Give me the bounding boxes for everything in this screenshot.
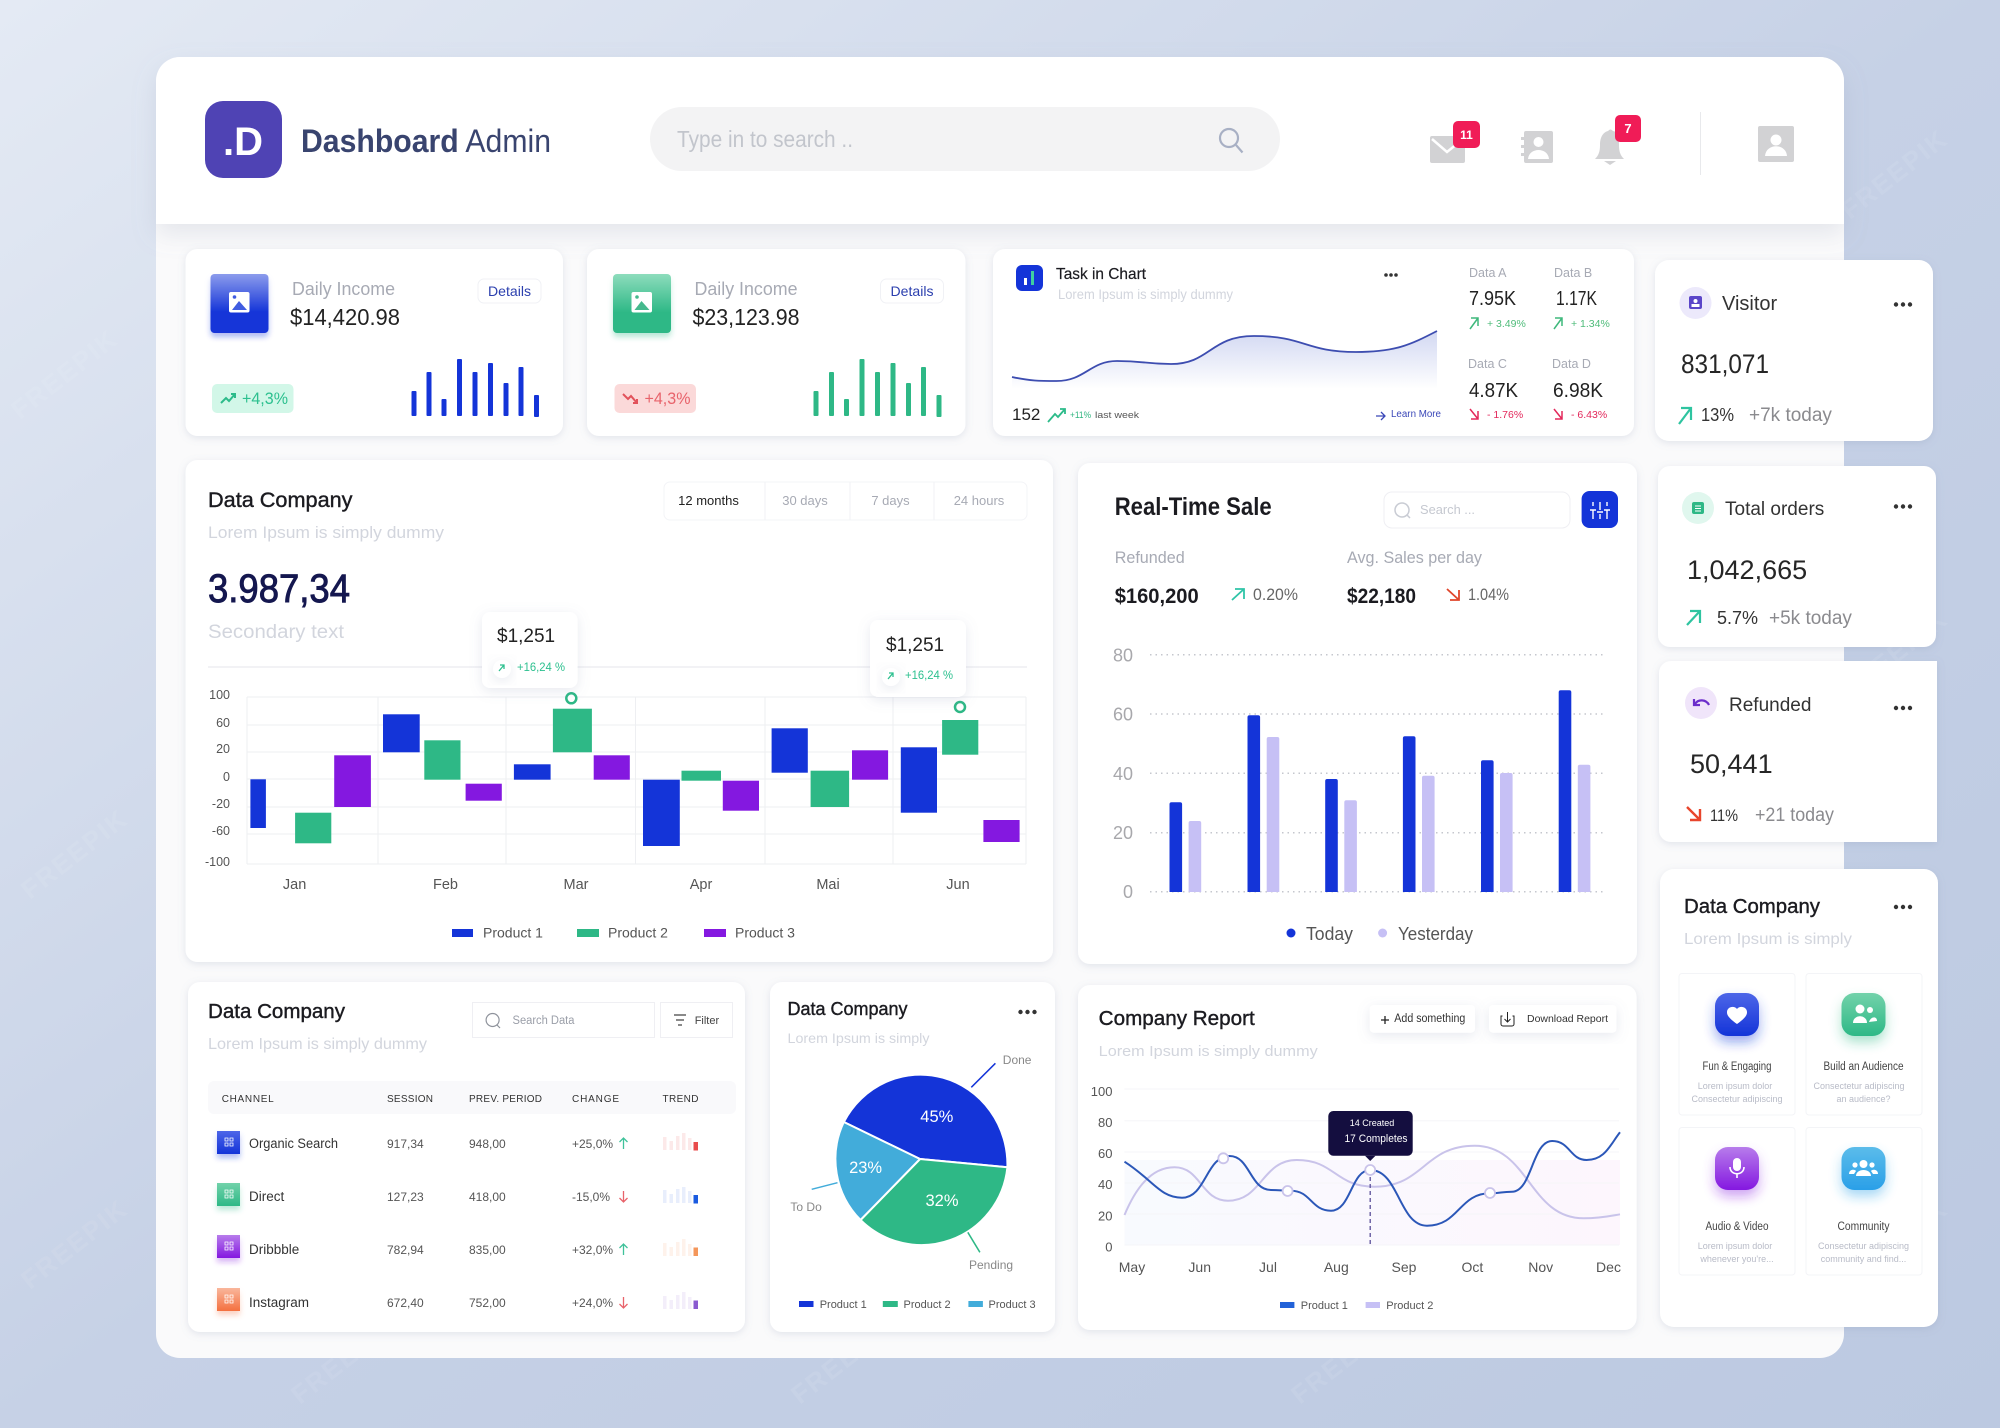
stat: refunded [1115,548,1298,608]
icon: filter button [1582,491,1618,528]
row: organic search: Organic Search [249,1136,338,1151]
trend stat [1687,608,1852,629]
legend [452,924,795,940]
tile: fun and engaging: Lorem ipsum dolor [1698,1081,1772,1091]
tile: audio and video [1679,1128,1795,1275]
grouped bar chart [1113,646,1605,902]
tile: fun and engaging: Consectetur adipiscing [1691,1094,1783,1104]
stat: data d: - 6.43% [1571,409,1607,421]
line chart: 60 [1098,1146,1112,1161]
row: direct: -15,0% [572,1190,610,1204]
table header [208,1081,736,1114]
tile: audio and video: whenever you're... [1699,1254,1774,1264]
heading: Company Report [1099,1008,1255,1030]
search field [472,1002,654,1038]
callout: done [971,1053,1032,1087]
search bar: Type in to search .. [677,126,853,152]
filter button [660,1002,732,1038]
search field [1384,492,1570,528]
stat: data a [1469,266,1526,330]
tile: fun and engaging [1679,974,1795,1115]
waterfall bar chart: Mai [816,877,840,893]
tile: community: Community [1838,1221,1890,1233]
trend stat: +5k today [1769,608,1852,629]
heading: Data Company [208,1001,345,1023]
row: dribbble: 782,94 [387,1243,424,1257]
line chart: Jul [1259,1259,1277,1275]
waterfall bar chart: -60 [212,824,230,838]
tooltip: march: $1,251 [497,626,555,647]
trend stat [1687,805,1834,826]
text: FREEPIK [1285,1308,1404,1410]
stat: data d [1552,357,1607,421]
line chart: Dec [1596,1259,1621,1275]
row: instagram: +24,0% [572,1296,613,1310]
stat: avg sales: 1.04% [1468,586,1509,604]
waterfall bar chart: 100 [209,688,230,702]
stat: data c: 4.87K [1469,380,1519,402]
line chart: Oct [1462,1259,1483,1275]
label: Daily Income [694,279,798,299]
button: download report: Download Report [1527,1013,1608,1025]
stat: avg sales: Avg. Sales per day [1347,548,1482,567]
trend stat: 5.7% [1717,608,1758,628]
row: direct: Direct [249,1189,285,1204]
text: FREEPIK [1835,123,1954,225]
mini bar chart [412,359,539,417]
legend: Product 1 [483,924,543,940]
line chart: 20 [1098,1208,1112,1224]
panel: pie chart [770,982,1055,1332]
tile: build an audience: Build an Audience [1824,1061,1904,1073]
panel: channel table: Lorem Ipsum is simply dummy [208,1036,427,1053]
stat: refunded: $160,200 [1115,585,1199,608]
period selector: 7 days [871,493,910,508]
stat: data b: 1.17K [1556,288,1598,310]
stat: data c: Data C [1468,357,1507,371]
icon: bell with badge: 7 [1624,121,1632,136]
text: FREEPIK [785,1308,904,1410]
waterfall bar chart: -100 [205,855,230,869]
stat: refunded: Refunded [1115,548,1185,567]
icon: refund [1685,687,1717,719]
panel: visitor: Visitor [1722,293,1778,315]
row: dribbble: Dribbble [249,1242,299,1257]
panel: refunded [1659,661,1937,842]
trend stat: 11% [1710,806,1738,825]
title: Dashboard Admin [301,123,551,159]
stat: data b: Data B [1554,266,1592,280]
legend [799,1299,1036,1311]
tooltip: created and completes: 17 Completes [1344,1133,1408,1145]
waterfall bar chart: 20 [216,742,230,756]
icon: image tile green [613,274,671,333]
waterfall bar chart: Mar [564,877,589,893]
tooltip: june [870,620,966,697]
line chart: Jun [1188,1259,1211,1275]
stat: data d: 6.98K [1553,380,1604,402]
table header: CHANNEL [222,1094,274,1105]
panel: data company chart [186,460,1053,962]
callout: to do: To Do [790,1200,822,1214]
search bar [650,107,1280,171]
row: organic search: 917,34 [387,1137,424,1151]
button: add something: Add something [1394,1013,1465,1025]
legend [1286,924,1473,944]
heading: Data Company [208,489,353,512]
tooltip: march [482,612,578,688]
tooltip: june: +16,24 % [905,670,953,682]
pie [835,1075,1007,1245]
period selector: 24 hours [954,493,1005,508]
text: FREEPIK [285,1308,404,1410]
row: organic search [217,1131,698,1154]
waterfall bar chart: 60 [216,716,230,730]
stat: data a: 7.95K [1469,288,1517,310]
period selector [664,482,1027,520]
legend: Product 1 [820,1299,867,1311]
stat: data b [1554,266,1610,330]
tile: audio and video: Lorem ipsum dolor [1698,1241,1772,1251]
button: add something [1370,1005,1475,1033]
panel: total orders [1658,466,1936,647]
value: $14,420.98 [290,304,400,330]
tile: community: Consectetur adipiscing [1818,1241,1909,1251]
value: $23,123.98 [692,304,800,330]
waterfall bar chart: -20 [212,797,230,811]
line chart: 0 [1105,1240,1112,1254]
tile: build an audience [1806,974,1922,1115]
panel: daily income green [587,249,966,436]
button: download report [1489,1005,1616,1033]
legend: Product 3 [735,924,795,940]
logo: .D [223,120,263,164]
panel: task in chart: Lorem Ipsum is simply dummy [1058,287,1233,302]
line chart: Nov [1528,1259,1553,1275]
stat: data a: Data A [1469,266,1507,280]
icon: visitor [1680,287,1712,319]
stat: avg sales: $22,180 [1347,585,1416,608]
footer stats: +11% [1070,410,1091,421]
panel: data company features: Lorem Ipsum is simply [1684,931,1852,948]
grouped bar chart: 80 [1113,646,1133,666]
trend stat: 13% [1701,405,1734,425]
icon: mail with badge [1430,121,1480,163]
row: direct: 418,00 [469,1190,506,1204]
icon: user profile [1758,126,1794,162]
row: instagram: Instagram [249,1295,309,1310]
tile: community [1806,1128,1922,1275]
heading: Real-Time Sale [1115,493,1272,521]
menu dots [1894,302,1912,307]
waterfall bar chart: Feb [433,877,458,893]
waterfall bar chart: Jan [283,877,306,893]
row: direct [217,1183,698,1206]
table header: PREV. PERIOD [469,1094,542,1105]
tile: build an audience: Consectetur adipiscing [1813,1081,1905,1091]
menu dots [1384,273,1398,277]
search field: Search ... [1420,502,1475,517]
legend: Product 2 [904,1299,951,1311]
menu dots [1894,905,1912,909]
stat: avg sales [1347,548,1509,608]
stat: data c: - 1.76% [1487,409,1523,421]
pie labels [849,1108,959,1210]
panel: task in chart [993,249,1634,436]
legend: Product 3 [988,1299,1036,1311]
line chart: May [1119,1259,1145,1275]
menu dots [1018,1010,1037,1014]
heading: Data Company [788,999,908,1019]
grouped bar chart: 20 [1113,823,1133,843]
stat: data d: Data D [1552,357,1591,371]
text: FREEPIK [1835,603,1954,705]
icon: orders [1682,492,1714,524]
line chart: Sep [1392,1259,1417,1275]
footer stats [1012,405,1441,424]
tile: audio and video: Audio & Video [1706,1221,1768,1233]
label: Daily Income [292,279,395,299]
panel: total orders: 1,042,665 [1687,555,1807,585]
grouped bar chart: 40 [1113,764,1133,784]
waterfall bar chart: Jun [946,877,970,893]
panel: data company chart: Secondary text [208,622,345,643]
table header: SESSION [387,1094,433,1105]
row: organic search: +25,0% [572,1137,613,1151]
change pill: +4,3% [644,389,690,408]
details button [880,279,944,303]
pie labels: 45% [920,1108,954,1126]
icon: image tile blue [210,274,268,333]
panel: data company features [1660,869,1938,1327]
callout: to do [790,1183,838,1214]
footer stats: Learn More [1391,409,1441,420]
table header: CHANGE [572,1094,619,1105]
logo [205,101,282,178]
tooltip: march: +16,24 % [517,662,565,674]
line chart: 80 [1098,1115,1112,1130]
line chart: Aug [1324,1259,1349,1275]
trend stat: +21 today [1755,805,1834,826]
stat: data b: + 1.34% [1571,318,1610,330]
icon: chart tile [1016,265,1043,291]
row: dribbble: 835,00 [469,1243,506,1257]
panel: total orders: Total orders [1725,499,1824,520]
icon: mail with badge: 11 [1460,128,1473,142]
panel: company report [1078,985,1637,1330]
menu dots [1894,504,1912,509]
tile: fun and engaging: Fun & Engaging [1702,1061,1772,1073]
pie labels: 23% [849,1159,882,1177]
grouped bar chart: 0 [1123,882,1133,902]
search field: Search Data [512,1015,575,1027]
row: direct: 127,23 [387,1190,424,1204]
legend: Yesterday [1398,924,1473,944]
mini bar chart [814,359,942,417]
text: FREEPIK [15,803,134,905]
details button [478,279,541,303]
panel: visitor: 831,071 [1681,349,1769,379]
panel: refunded: Refunded [1729,695,1811,716]
table header: TREND [662,1094,698,1105]
footer stats: last week [1095,410,1139,421]
legend: Product 1 [1301,1300,1348,1312]
panel: main dashboard sheet [156,57,1844,1358]
row: instagram: 752,00 [469,1296,506,1310]
tooltip: created and completes: 14 Created [1350,1118,1394,1128]
icon: contacts [1521,131,1553,163]
footer stats: 152 [1012,405,1040,424]
panel: visitor [1655,260,1933,441]
legend: Product 2 [1386,1300,1433,1312]
grouped bar chart: 60 [1113,705,1133,725]
icon: bell with badge [1595,115,1641,165]
change pill [212,384,294,413]
key value: 3.987,34 [208,567,350,611]
trend stat: +7k today [1749,405,1832,426]
panel: pie chart: Lorem Ipsum is simply [788,1030,930,1046]
menu dots [1894,706,1912,710]
header bar [156,57,1844,224]
stat: data c [1468,357,1523,421]
trend stat [1679,405,1832,426]
change pill: +4,3% [242,389,288,408]
pie labels: 32% [925,1192,959,1210]
tooltip: june: $1,251 [886,635,944,656]
period selector: 30 days [782,493,828,508]
text: FREEPIK [5,323,124,425]
row: dribbble: +32,0% [572,1243,613,1257]
legend: Product 2 [608,924,668,940]
tile: build an audience: an audience? [1836,1094,1891,1104]
row: instagram: 672,40 [387,1296,424,1310]
line chart: 100 [1091,1084,1112,1099]
waterfall bar chart: 0 [223,770,230,784]
details button: Details [890,283,934,299]
stat: refunded: 0.20% [1253,586,1298,604]
filter button: Filter [695,1015,719,1027]
row: organic search: 948,00 [469,1137,506,1151]
area chart [1012,331,1437,389]
row: instagram [217,1288,698,1311]
change pill [614,384,696,413]
panel: real-time sale [1078,463,1637,964]
line chart [1091,1084,1621,1275]
line chart: 40 [1098,1177,1112,1192]
heading: Task in Chart [1056,266,1147,283]
panel: company report: Lorem Ipsum is simply dummy [1099,1043,1318,1060]
details button: Details [488,283,531,299]
legend [1280,1300,1433,1312]
waterfall bar chart [205,688,1026,893]
panel: refunded: 50,441 [1690,749,1773,779]
panel: channel table [188,982,745,1332]
callout: pending [968,1232,1013,1272]
legend: Today [1306,924,1353,944]
stat: data a: + 3.49% [1487,318,1526,330]
tooltip: created and completes [1328,1111,1413,1161]
panel: daily income blue [186,249,563,436]
panel: data company chart: Lorem Ipsum is simply dummy [208,523,445,542]
waterfall bar chart: Apr [690,877,712,893]
tile: community: community and find... [1821,1254,1906,1264]
text: FREEPIK [15,1193,134,1295]
callout: pending: Pending [969,1258,1013,1272]
period selector: 12 months [678,493,739,508]
callout: done: Done [1003,1053,1032,1067]
heading: Data Company [1684,895,1821,918]
row: dribbble [217,1235,698,1258]
text: FREEPIK [1835,1193,1954,1295]
